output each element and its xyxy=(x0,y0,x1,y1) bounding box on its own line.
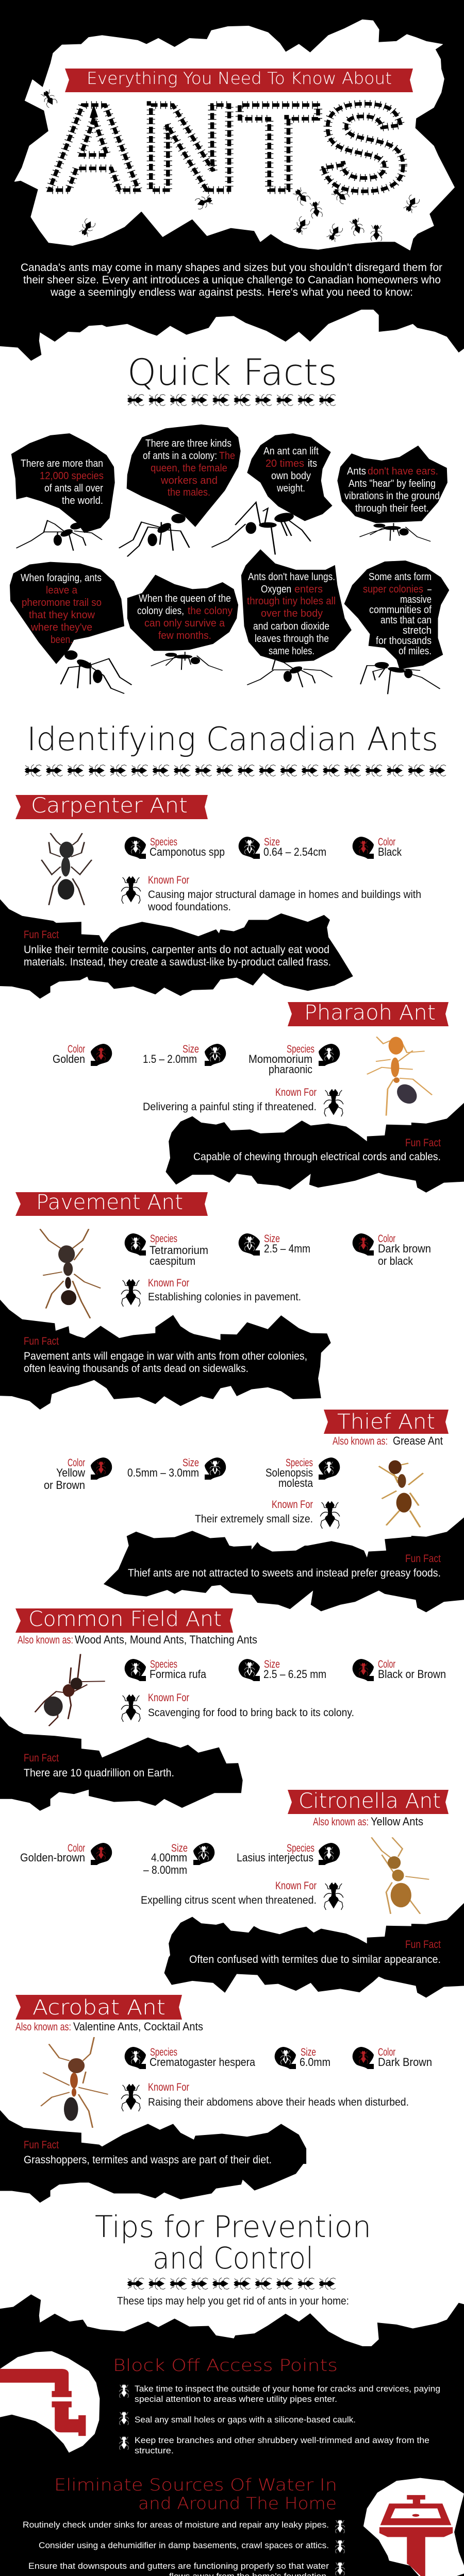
scattered ants xyxy=(40,89,421,243)
panel: fact 7 lungs: over the body xyxy=(261,608,323,619)
known for: Known For xyxy=(148,2081,189,2093)
color xyxy=(353,2046,432,2069)
intro text xyxy=(21,262,442,298)
fun fact blob xyxy=(0,899,353,999)
panel: fact 4 ears: Ants xyxy=(347,466,366,477)
tips list: Seal any small holes or gaps with a silicone-based caulk. xyxy=(135,2415,356,2425)
known for: Raising their abdomens above their heads when disturbed. xyxy=(148,2096,409,2108)
photo: field ant xyxy=(35,1654,105,1726)
intro text: wage a seemingly endless war against pests. Here's what you need to know: xyxy=(50,286,413,298)
icon: ant carrying xyxy=(151,652,223,670)
panel: fact 8 super colonies: massive xyxy=(400,594,432,605)
also known as: Also known as: xyxy=(18,1634,73,1646)
panel: common field ant xyxy=(0,1607,446,1811)
tips list: Ensure that downspouts and gutters are functioning properly so that water xyxy=(28,2561,329,2571)
panel: fact 2 kinds: queen, the female xyxy=(151,463,227,474)
panel: fact 8 super colonies: stretch xyxy=(403,625,432,636)
fun fact blob xyxy=(104,1517,464,1612)
also known as: Valentine Ants, Cocktail Ants xyxy=(73,2020,203,2033)
size: 2.5 – 4mm xyxy=(264,1242,310,1255)
panel: fact 4 ears: don't have ears. xyxy=(368,466,438,477)
size xyxy=(275,2046,330,2069)
panel: fact 1 species: There are more than xyxy=(21,458,103,469)
tips intro text: These tips may help you get rid of ants in your home: xyxy=(117,2295,349,2307)
fun fact blob xyxy=(164,1903,464,1997)
size: 1.5 – 2.0mm xyxy=(143,1053,197,1065)
tips list xyxy=(119,2384,440,2455)
color: Golden-brown xyxy=(20,1851,85,1864)
icon: ant carrying xyxy=(247,659,333,687)
photo: carpenter ant xyxy=(41,833,92,905)
also known as: Yellow Ants xyxy=(371,1815,423,1828)
size xyxy=(127,1457,226,1480)
banner: Pavement Ant xyxy=(36,1191,183,1214)
panel: fact 6 queen: few months. xyxy=(158,630,211,641)
panel: carpenter ant xyxy=(0,794,421,999)
size: Size xyxy=(301,2046,316,2058)
known for: Expelling citrus scent when threatened. xyxy=(141,1894,317,1906)
icon: pipe on white blob xyxy=(0,2351,100,2453)
panel: pharaoh ant xyxy=(53,1001,464,1193)
species: Species xyxy=(150,836,177,848)
panel: fact 7 lungs: through tiny holes all xyxy=(247,596,336,607)
color: Black xyxy=(378,845,402,858)
known for: wood foundations. xyxy=(147,901,231,913)
panel: fact 3 lift xyxy=(211,433,333,554)
tips list: Consider using a dehumidifier in damp basements, crawl spaces or attics. xyxy=(39,2540,329,2550)
panel: fact 7 lungs xyxy=(241,549,352,687)
color: Dark brown xyxy=(378,1242,431,1255)
fun fact blob: Fun Fact xyxy=(405,1939,441,1951)
panel: fact 8 super colonies xyxy=(344,561,449,694)
known for: Causing major structural damage in homes and buildings with xyxy=(148,889,421,901)
also known as xyxy=(333,1434,443,1447)
species xyxy=(125,2046,256,2069)
size: 6.0mm xyxy=(300,2056,330,2069)
color xyxy=(353,836,402,859)
photo: pavement ant xyxy=(40,1229,101,1318)
species: caespitum xyxy=(150,1255,195,1267)
panel: fact 5 foraging: pheromone trail so xyxy=(22,597,102,608)
tips list: Routinely check under sinks for areas of moisture and repair any leaky pipes. xyxy=(23,2520,329,2530)
known for: Known For xyxy=(275,1880,317,1892)
icon: sink on white blob xyxy=(363,2478,464,2576)
banner: Pharaoh Ant xyxy=(304,1001,436,1025)
panel: fact 5 foraging xyxy=(10,562,131,693)
ANTS word traced by ants: ANTS xyxy=(46,78,408,216)
panel: eliminate sources of water: Eliminate Sources Of Water In xyxy=(54,2475,337,2495)
heading: Identifying Canadian Ants: Identifying Canadian Ants xyxy=(27,720,438,758)
panel: eliminate sources of water xyxy=(23,2475,464,2576)
species: pharaonic xyxy=(269,1063,312,1076)
also known as: Grease Ant xyxy=(393,1434,443,1447)
also known as: Also known as: xyxy=(313,1816,369,1828)
also known as xyxy=(313,1815,423,1828)
species xyxy=(125,1233,208,1267)
color: Color xyxy=(68,1842,85,1854)
panel: fact 2 kinds: The xyxy=(219,450,235,462)
fun fact blob: Fun Fact xyxy=(405,1137,441,1149)
species: Species xyxy=(287,1043,314,1055)
fun fact blob xyxy=(0,1716,243,1811)
color: Dark Brown xyxy=(378,2056,432,2069)
title banner: Everything You Need To Know About xyxy=(87,69,392,88)
species: Species xyxy=(150,1233,177,1245)
known for xyxy=(121,874,421,913)
icon: ant carrying xyxy=(16,520,102,551)
fun fact blob: Fun Fact xyxy=(24,2139,59,2151)
panel: fact 8 super colonies: ants that can xyxy=(380,615,432,626)
size: Size xyxy=(183,1043,199,1055)
known for xyxy=(143,1087,343,1116)
panel: fact 2 kinds xyxy=(119,425,241,556)
fun fact blob xyxy=(165,1103,464,1193)
size: – 8.00mm xyxy=(143,1863,187,1876)
color xyxy=(353,1233,431,1267)
color xyxy=(44,1457,112,1492)
panel: pavement ant xyxy=(0,1191,431,1410)
photo: pharaoh ant xyxy=(367,1037,432,1115)
panel: fact 6 queen: When the queen of the xyxy=(139,593,231,604)
size xyxy=(239,836,326,859)
known for: Known For xyxy=(272,1499,313,1511)
banner: Common Field Ant xyxy=(28,1607,222,1631)
size: 2.5 – 6.25 mm xyxy=(263,1668,326,1681)
known for: Scavenging for food to bring back to its colony. xyxy=(148,1707,354,1719)
fun fact blob: Unlike their termite cousins, carpenter ants do not actually eat wood xyxy=(24,944,329,956)
panel: acrobat ant xyxy=(0,1995,432,2202)
fun fact blob: Fun Fact xyxy=(24,1335,59,1347)
panel: fact 8 super colonies: for thousands xyxy=(376,635,432,647)
fun fact blob: There are 10 quadrillion on Earth. xyxy=(24,1767,174,1779)
panel: fact 1 species: of ants all over xyxy=(44,483,103,494)
species: Camponotus spp xyxy=(150,845,225,858)
panel: eliminate sources of water: and Around The Home xyxy=(138,2494,337,2513)
also known as: Also known as: xyxy=(333,1435,388,1447)
panel: fact 4 ears: Ants "hear" by feeling xyxy=(349,478,436,489)
color: Color xyxy=(378,1658,395,1670)
panel: fact 6 queen: colony dies, xyxy=(137,605,184,617)
title panel: white torn blob with banner and ants xyxy=(15,20,454,250)
size: Size xyxy=(264,836,280,848)
fun fact blob: Pavement ants will engage in war with ants from other colonies, xyxy=(24,1350,307,1362)
size xyxy=(239,1233,310,1256)
also known as: Also known as: xyxy=(15,2021,71,2033)
panel: fact 3 lift: An ant can lift xyxy=(263,446,319,457)
color: Golden xyxy=(53,1053,85,1065)
known for xyxy=(195,1499,340,1529)
heading: Tips for Prevention and Control: and Control xyxy=(153,2241,313,2276)
tips list: Keep tree branches and other shrubbery well-trimmed and away from the xyxy=(135,2435,429,2445)
panel: fact 7 lungs: same holes. xyxy=(269,646,314,657)
fun fact blob: materials. Instead, they create a sawdust-like by-product called frass. xyxy=(24,956,331,968)
fun fact blob: Fun Fact xyxy=(24,1752,59,1764)
color: Yellow xyxy=(56,1466,85,1479)
size: Size xyxy=(264,1233,280,1245)
banner: Carpenter Ant xyxy=(31,794,188,818)
banner: Acrobat Ant xyxy=(32,1996,165,2020)
panel: fact 3 lift: its xyxy=(308,458,317,469)
panel: fact 3 lift: 20 times xyxy=(266,458,304,469)
also known as: Wood Ants, Mound Ants, Thatching Ants xyxy=(75,1633,257,1646)
ant divider xyxy=(127,2278,336,2290)
species: Species xyxy=(286,1457,313,1469)
panel: fact 5 foraging: When foraging, ants xyxy=(21,572,102,584)
color: Black or Brown xyxy=(378,1668,446,1681)
panel: block off access points: Block Off Access Points xyxy=(113,2355,338,2375)
panel: thief ant xyxy=(44,1410,464,1612)
heading: Quick Facts: Quick Facts xyxy=(127,351,337,394)
intro text: their sheer size. Every ant introduces a unique challenge to Canadian homeowners who xyxy=(23,274,441,286)
panel: fact 8 super colonies: Some ants form xyxy=(369,571,432,583)
panel: fact 3 lift: own body xyxy=(271,470,311,482)
banner: Thief Ant xyxy=(337,1410,435,1434)
fun fact blob: often leaving thousands of ants dead on sidewalks. xyxy=(24,1363,248,1375)
size: 0.64 – 2.54cm xyxy=(263,845,326,858)
known for: Establishing colonies in pavement. xyxy=(148,1291,301,1303)
species xyxy=(125,836,225,859)
known for xyxy=(121,1692,354,1722)
fun fact blob: Capable of chewing through electrical cords and cables. xyxy=(193,1151,441,1163)
banner: Citronella Ant xyxy=(299,1789,441,1813)
tips list xyxy=(23,2520,345,2576)
panel: fact 3 lift: weight. xyxy=(276,483,305,494)
size: Size xyxy=(264,1658,280,1670)
species: Momomorium xyxy=(248,1053,312,1065)
ant divider xyxy=(25,765,446,776)
icon: ant carrying xyxy=(360,662,440,694)
photo: acrobat ant xyxy=(41,2037,108,2128)
panel: fact 7 lungs: leaves through the xyxy=(255,633,329,645)
photo: citronella ant xyxy=(371,1837,429,1914)
panel: citronella ant xyxy=(20,1789,464,1997)
color: Color xyxy=(68,1043,85,1055)
color: or Brown xyxy=(44,1479,85,1492)
size: Size xyxy=(183,1457,199,1469)
fun fact blob: Grasshoppers, termites and wasps are part of their diet. xyxy=(24,2154,272,2166)
fun fact blob: Thief ants are not attracted to sweets and instead prefer greasy foods. xyxy=(128,1567,441,1579)
known for: Known For xyxy=(148,1277,189,1289)
black tips background xyxy=(0,2294,464,2576)
species: Species xyxy=(287,1842,314,1854)
color: Color xyxy=(378,836,395,848)
size: 4.00mm xyxy=(151,1851,187,1864)
panel: fact 8 super colonies: communities of xyxy=(369,604,432,616)
fun fact blob: Often confused with termites due to similar appearance. xyxy=(189,1954,441,1965)
heading: Tips for Prevention and Control xyxy=(95,2209,371,2276)
species xyxy=(248,1043,340,1076)
panel: fact 5 foraging: leave a xyxy=(46,585,78,596)
panel: fact 6 queen: can only survive a xyxy=(144,618,225,629)
black header background xyxy=(0,0,464,361)
color xyxy=(53,1043,112,1066)
panel: fact 7 lungs: Oxygen xyxy=(261,584,291,595)
known for: Known For xyxy=(275,1087,317,1098)
panel: fact 5 foraging: where they've xyxy=(30,622,92,633)
panel: fact 8 super colonies: – xyxy=(427,584,432,595)
also known as xyxy=(15,2020,203,2033)
panel: fact 1 species: the world. xyxy=(62,495,103,506)
panel: fact 5 foraging: that they know xyxy=(29,609,95,621)
color xyxy=(353,1658,446,1681)
panel: fact 4 ears: vibrations in the ground xyxy=(344,490,440,502)
species: Crematogaster hespera xyxy=(150,2056,256,2069)
color: Color xyxy=(68,1457,85,1469)
banner xyxy=(15,1995,182,2020)
panel: fact 4 ears: through their feet. xyxy=(355,503,429,514)
fun fact blob: Fun Fact xyxy=(405,1553,441,1565)
panel: fact 2 kinds: of ants in a colony: xyxy=(143,450,217,462)
species: Species xyxy=(150,1658,177,1670)
species xyxy=(237,1842,340,1865)
icon: ant carrying xyxy=(61,650,131,693)
size: Size xyxy=(171,1842,188,1854)
known for: Delivering a painful sting if threatened. xyxy=(143,1101,317,1113)
panel: fact 6 queen xyxy=(127,574,238,670)
species xyxy=(266,1457,340,1489)
ANTS word traced by ants: ANTS xyxy=(46,78,408,216)
panel: fact 4 ears xyxy=(337,446,448,541)
species: Lasius interjectus xyxy=(237,1851,313,1864)
panel: fact 7 lungs: Ants don't have lungs. xyxy=(248,571,335,583)
white torn paper blob xyxy=(15,20,454,250)
known for xyxy=(121,2081,409,2111)
known for: Known For xyxy=(148,874,189,886)
known for xyxy=(141,1880,343,1910)
panel: fact 6 queen: the colony xyxy=(188,605,233,617)
size: 0.5mm – 3.0mm xyxy=(127,1466,199,1479)
icon: ant carrying xyxy=(119,514,189,556)
known for: Known For xyxy=(148,1692,189,1704)
panel: fact 1 species: 12,000 species xyxy=(40,470,104,482)
intro text: Canada's ants may come in many shapes and sizes but you shouldn't disregard them for xyxy=(21,262,442,274)
panel: fact 8 super colonies: of miles. xyxy=(399,646,432,657)
heading: Tips for Prevention and Control: Tips for Prevention xyxy=(95,2209,371,2244)
panel: fact 2 kinds: There are three kinds xyxy=(145,438,231,449)
species: Formica rufa xyxy=(150,1668,207,1681)
panel: fact 2 kinds: workers and xyxy=(160,475,218,486)
tips list: structure. xyxy=(135,2446,174,2455)
icon: ant carrying xyxy=(211,502,311,554)
size xyxy=(143,1043,226,1066)
panel: block off access points xyxy=(0,2351,440,2455)
tips list: special attention to areas where utility pipes enter. xyxy=(135,2394,337,2404)
species: Solenopsis xyxy=(266,1466,313,1479)
species xyxy=(125,1658,207,1681)
ant divider xyxy=(127,394,336,406)
known for: Their extremely small size. xyxy=(195,1513,313,1525)
panel: fact 8 super colonies: super colonies xyxy=(363,584,423,595)
color: Color xyxy=(378,2046,395,2058)
color xyxy=(20,1842,112,1865)
color: or black xyxy=(378,1255,413,1267)
species: Tetramorium xyxy=(150,1244,208,1257)
size xyxy=(143,1842,214,1876)
color: Color xyxy=(378,1233,395,1245)
fun fact blob xyxy=(0,2110,306,2202)
fun fact blob: Fun Fact xyxy=(24,929,59,941)
known for xyxy=(121,1277,301,1307)
size xyxy=(239,1658,326,1681)
panel: fact 5 foraging: been. xyxy=(51,634,73,646)
species: Species xyxy=(150,2046,177,2058)
photo: thief ant xyxy=(379,1460,423,1527)
tips list: Take time to inspect the outside of your home for cracks and crevices, paying xyxy=(135,2384,440,2394)
species: molesta xyxy=(278,1477,313,1489)
fun fact blob xyxy=(0,1299,331,1410)
panel: fact 7 lungs: enters xyxy=(294,584,323,595)
panel: fact 2 kinds: the males. xyxy=(168,487,210,498)
panel: fact 7 lungs: and carbon dioxide xyxy=(253,621,329,632)
icon: ant carrying xyxy=(359,523,430,541)
panel: fact 1 species xyxy=(11,433,115,551)
